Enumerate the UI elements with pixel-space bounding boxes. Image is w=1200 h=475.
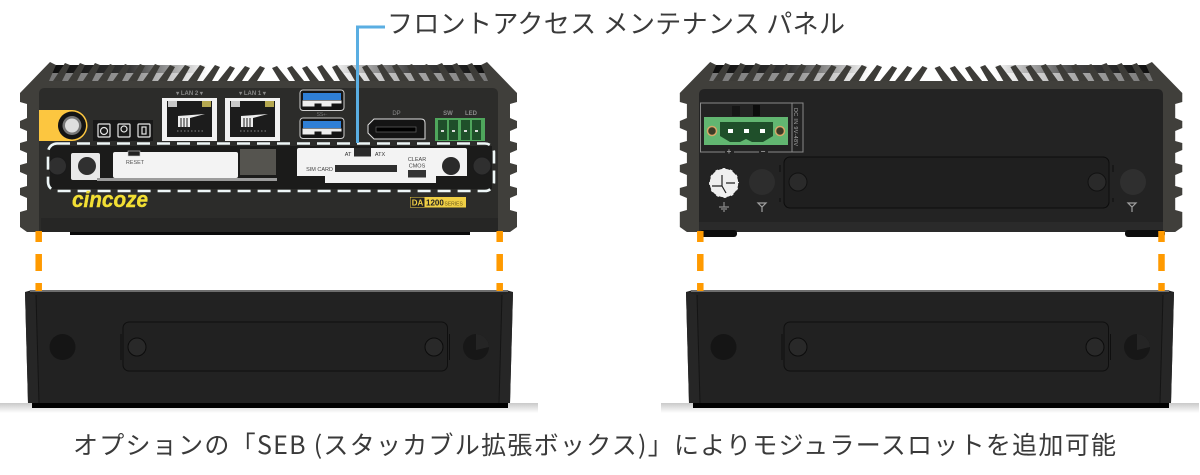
front panel face [39,88,498,232]
status LED icons [93,120,153,141]
DC power input block: − [761,147,766,156]
right foot [1125,230,1165,237]
USB 3 port upper [300,90,344,110]
orange dashed guide, front left [35,231,42,291]
LAN 2 port [162,98,217,141]
DA 1200 series badge: 1200 [426,198,444,208]
yellow ground tab and power button [39,110,88,141]
orange dashed guide, front right [496,231,503,291]
reset label plate: RESET [126,160,145,166]
DC power input block: DC IN 9V-48V [792,108,798,146]
housing with heat-sink fins [20,62,517,232]
DC power input block [700,103,803,156]
SIM and jumper label plate: AT [345,152,352,158]
lower stackable expansion box, right [661,290,1199,413]
dashed highlight around maintenance panel [48,144,494,191]
orange dashed guide, rear left [697,231,704,291]
SW label: SW [443,111,453,117]
right antenna plug [1120,169,1146,195]
USB 3 port lower [300,118,344,138]
SIM and jumper label plate: SIM CARD [306,167,333,173]
left foot [700,230,737,237]
SIM and jumper label plate [297,148,467,183]
caption: オプションの「SEB (スタッカブル拡張ボックス)」によりモジュラースロットを追加可能 [73,426,1116,462]
USB label: SS⇠ [317,112,327,118]
right antenna symbol [1128,203,1136,212]
internal grey connector [240,149,276,175]
DA 1200 series badge: DA [412,198,423,208]
left outer screw [48,157,66,175]
SIM and jumper label plate: CLEAR [408,157,426,163]
SW and LED green connector [435,118,485,141]
right outer screw [473,157,491,175]
base shadow [70,232,470,235]
DC power input block: + [727,147,732,156]
ground screw [709,168,739,198]
title: front access maintenance panel: フロントアクセス メンテナンス パネル [387,4,845,41]
rear panel face [699,89,1163,232]
bottom band [699,222,1163,232]
white bracket with screw [71,153,100,180]
DisplayPort port [368,119,425,139]
DA 1200 series badge [410,197,466,208]
blue callout leader line [358,27,385,143]
LED label: LED [465,111,478,117]
expansion cover plate [780,157,1113,208]
SIM and jumper label plate: CMOS [409,164,426,170]
cincoze logo: cincoze [72,187,148,212]
LAN 1 port [225,98,280,141]
rear view device [680,62,1182,237]
maintenance bay recess [50,146,492,189]
DP label: DP [392,111,401,117]
front view device [20,62,517,235]
LAN 2 label: ▾ LAN 2 ▾ [175,91,204,97]
lower stackable expansion box, left [0,290,538,413]
left antenna plug [749,169,775,195]
housing with heat-sink fins [680,62,1182,232]
orange dashed guide, rear right [1158,231,1165,291]
bottom band [41,218,498,232]
left antenna symbol [758,203,766,212]
LAN 1 label: ▾ LAN 1 ▾ [238,91,267,97]
DA 1200 series badge: SERIES [444,202,464,208]
reset label plate [97,151,277,181]
SIM and jumper label plate: ATX [375,152,385,158]
ground symbol [719,202,729,211]
